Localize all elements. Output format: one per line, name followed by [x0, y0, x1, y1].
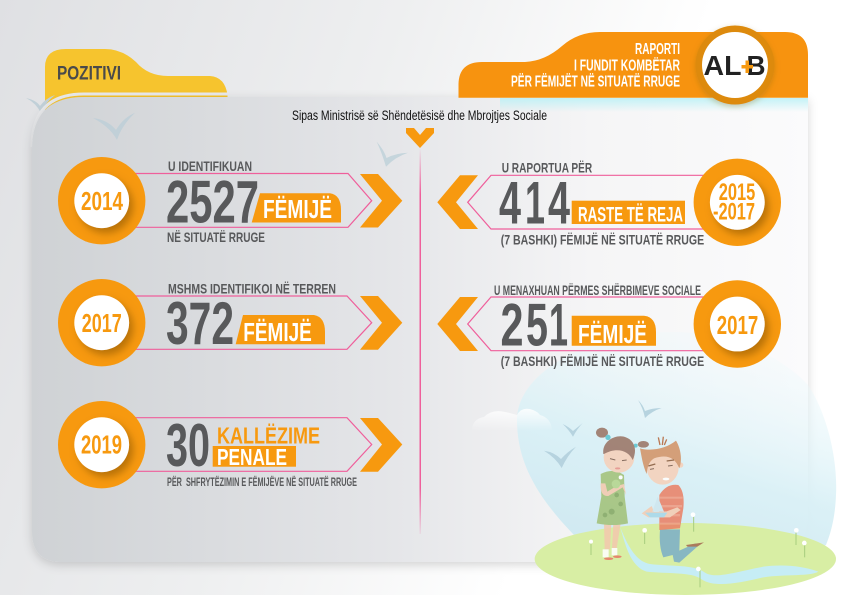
icon: down chevron	[406, 128, 434, 148]
boy	[640, 437, 704, 563]
panel rim	[32, 94, 240, 147]
row: 2014	[58, 157, 402, 245]
illustration: meadow and children	[535, 428, 836, 595]
header: report banner: PËR FËMIJËT NË SITUATË RRUGE	[511, 73, 680, 91]
row: 2017 right: U MENAXHUAN PËRMES SHËRBIMEVE SOCIALE	[494, 282, 701, 298]
tab: POZITIVI: POZITIVI	[57, 64, 121, 84]
row: 2019: PËR SHFRYTËZIMIN E FËMIJËVE NË SITUATË RRUGE	[167, 474, 357, 489]
row: 2017 left: 372	[166, 290, 234, 357]
row: 2017 left: 2017	[82, 308, 122, 338]
main grey panel	[32, 97, 808, 562]
icon: bird top left	[93, 113, 135, 140]
row: 2019: KALLËZIME	[217, 422, 320, 448]
number 251	[500, 292, 568, 359]
row: 2017 left: MSHMS IDENTIFIKOI NË TERREN	[168, 280, 336, 296]
row: 2014: NË SITUATË RRUGE	[167, 229, 265, 245]
row: 2015-2017 right: -2017	[713, 198, 755, 225]
row: 2015-2017 right: U RAPORTUA PËR	[502, 160, 592, 176]
header: report banner: RAPORTI	[635, 41, 680, 58]
logo: AL+B: B	[746, 50, 766, 81]
pink frame	[130, 174, 372, 227]
number 414: 4	[499, 169, 521, 236]
tab: POZITIVI	[45, 49, 228, 110]
row: 2017 right: (7 BASHKI) FËMIJË NË SITUATË RRUGE	[501, 353, 704, 369]
row: 2017 left: FËMIJË	[243, 317, 312, 347]
icon: bird centre	[377, 142, 408, 167]
right chevron	[360, 174, 402, 228]
number 414	[499, 169, 570, 236]
number 414: 1	[525, 169, 545, 236]
row: 2014: FËMIJË	[263, 194, 332, 224]
row: 2017 right	[437, 280, 781, 369]
logo: AL+B: AL	[704, 50, 742, 81]
row: 2014: 2014	[81, 186, 123, 216]
row: 2015-2017 right: (7 BASHKI) FËMIJË NË SITUATË RRUGE	[501, 231, 704, 247]
row: 2017 left	[58, 279, 402, 366]
icon: bird behind tab	[26, 95, 55, 113]
subtitle: Sipas Ministrisë së Shëndetësisë dhe Mbrojtjes Sociale	[292, 108, 547, 123]
number 251: 1	[549, 292, 568, 359]
blue blob background	[517, 332, 836, 560]
meadow	[535, 523, 836, 595]
row: 2015-2017 right: RASTE TË REJA	[578, 203, 683, 227]
number 251: 5	[526, 292, 548, 359]
stream	[620, 527, 818, 584]
header glow	[500, 98, 808, 112]
flowers	[589, 512, 807, 587]
row: 2019	[58, 401, 402, 489]
row: 2014: U IDENTIFIKUAN	[168, 158, 252, 174]
cloud	[472, 409, 552, 431]
row: 2019: PENALE	[217, 444, 287, 470]
row: 2017 right: FËMIJË	[578, 319, 647, 349]
year circle	[58, 157, 145, 244]
row: 2019: 2019	[81, 430, 122, 460]
row: 2017 right: 2017	[717, 310, 758, 340]
centre divider	[420, 148, 421, 534]
header: report banner: I FUNDIT KOMBËTAR	[574, 57, 680, 75]
icon: birds in sky	[544, 400, 662, 468]
number 251: 2	[500, 292, 524, 359]
row: 2015-2017 right: 2015	[719, 179, 755, 206]
logo: AL+B	[696, 26, 774, 104]
row: 2019: 30	[166, 412, 210, 479]
number 414: 4	[548, 169, 570, 236]
girl	[596, 428, 649, 560]
header: report banner	[458, 32, 808, 98]
row: 2015-2017 right	[437, 159, 781, 247]
row: 2014: 2527	[166, 169, 259, 236]
